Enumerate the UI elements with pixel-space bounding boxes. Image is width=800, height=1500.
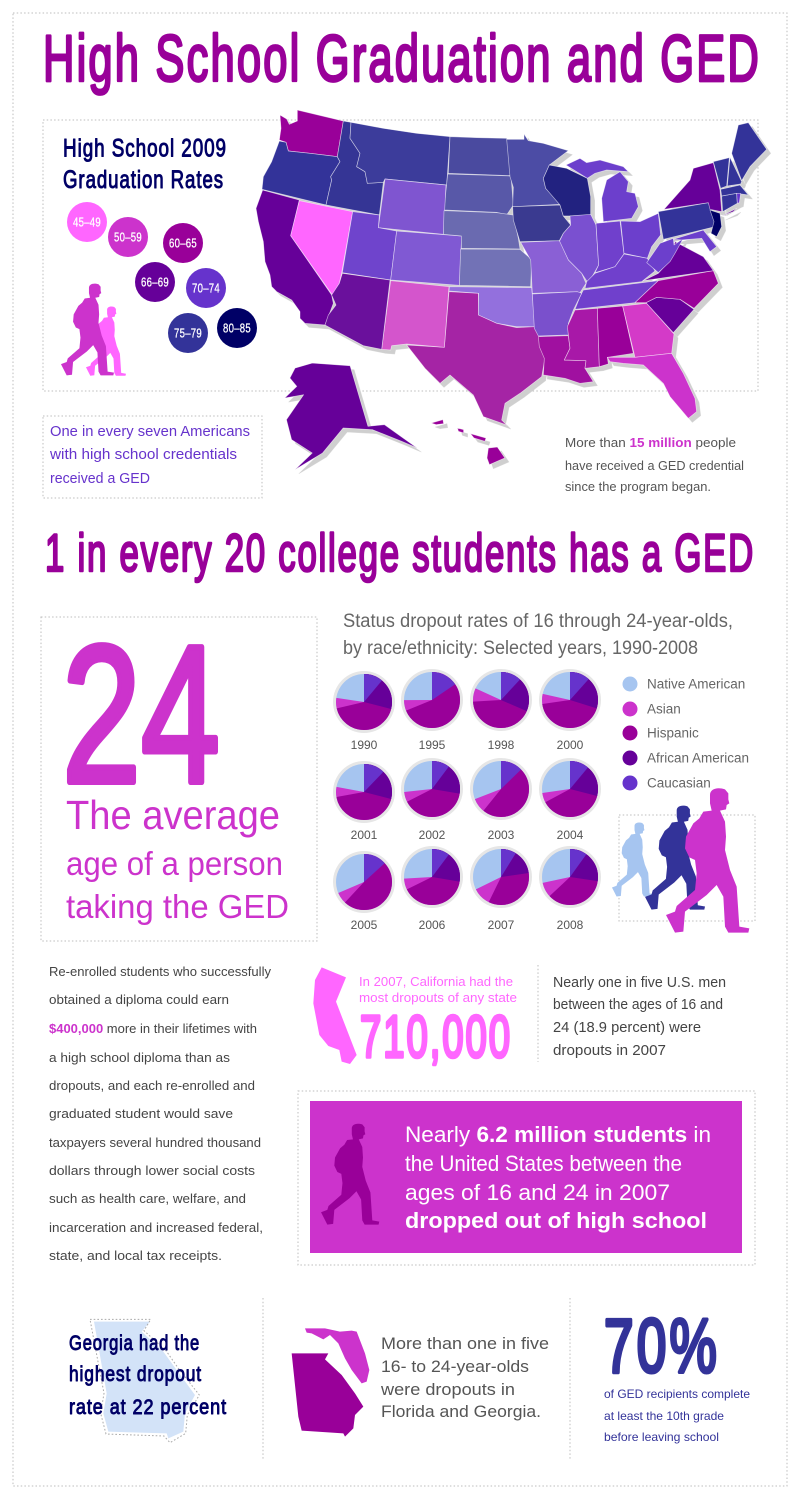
stat: California 710,000: most dropouts of any state [359, 990, 517, 1005]
stat: 70 percent [604, 1304, 750, 1444]
text block: one in five men: between the ages of 16 and [553, 996, 723, 1013]
text: Florida and Georgia: More than one in five [381, 1334, 549, 1353]
heading: status dropout rates [343, 611, 733, 659]
pie 2006: 2006 [419, 918, 446, 932]
pie 2002: 2002 [419, 828, 446, 842]
panel: 6.2 million [298, 1091, 755, 1265]
callout: one in seven: One in every seven Americans [50, 423, 250, 440]
pie 2000: 2000 [557, 738, 584, 752]
legend: graduation rate bubbles: 60–65 [169, 236, 197, 250]
panel: average age 24: 24 [62, 605, 220, 824]
text block: one in five men: 24 (18.9 percent) were [553, 1019, 701, 1036]
pie 2005 [333, 851, 395, 932]
text block: re-enrolled students: dollars through lower social costs [49, 1163, 256, 1178]
pie 2001: 2001 [351, 828, 378, 842]
legend: graduation rate bubbles: 45–49 [73, 214, 101, 230]
text block: re-enrolled students: $400,000 more in their lifetimes with [49, 1021, 257, 1036]
text block: re-enrolled students: obtained a diploma could earn [49, 992, 229, 1007]
pie 2006 [401, 846, 463, 932]
legend: race/ethnicity: African American [647, 750, 749, 766]
legend: race/ethnicity: Hispanic [647, 726, 699, 740]
panel: average age 24: The average [66, 792, 280, 838]
text block: re-enrolled students: such as health care, welfare, and [49, 1191, 246, 1206]
stat: 70 percent: of GED recipients complete [604, 1387, 750, 1401]
icon: three walking students [612, 788, 755, 933]
pie 1990 [333, 671, 395, 752]
text block: re-enrolled students: a high school diploma than as [49, 1050, 231, 1065]
pie 1998 [470, 669, 532, 752]
panel: average age 24: age of a person [66, 845, 283, 882]
callout text: the United States between the [405, 1151, 682, 1176]
pie 1995 [401, 669, 463, 752]
callout text [405, 1122, 711, 1233]
panel: Georgia: highest dropout [69, 1363, 202, 1386]
heading: status dropout rates: Status dropout rates of 16 through 24-year-olds, [343, 611, 733, 632]
text block: re-enrolled students: graduated student would save [49, 1106, 233, 1121]
pie 2008 [539, 846, 601, 932]
callout text: Nearly 6.2 million students in [405, 1122, 711, 1147]
callout: one in seven [43, 416, 262, 498]
pie 1990: 1990 [351, 738, 378, 752]
icon: Georgia and Florida [292, 1328, 369, 1437]
callout text: ages of 16 and 24 in 2007 [405, 1180, 670, 1205]
pie 2003: 2003 [488, 828, 515, 842]
pie 1998: 1998 [488, 738, 515, 752]
stat: California 710,000 [359, 974, 517, 1070]
text block: one in five men [538, 965, 726, 1062]
legend: graduation rate bubbles: 66–69 [141, 274, 169, 290]
text block: one in five men: dropouts in 2007 [553, 1042, 666, 1059]
callout: one in seven: with high school credentials [49, 446, 237, 463]
text: 15 million: since the program began. [565, 479, 711, 494]
legend: race/ethnicity: Native American [647, 676, 745, 692]
text: 15 million [565, 435, 744, 494]
pie 2007: 2007 [488, 918, 515, 932]
legend: graduation rate bubbles: 75–79 [174, 326, 202, 340]
text block: re-enrolled students: Re-enrolled students who successfully [49, 964, 272, 979]
legend: race/ethnicity: Caucasian [647, 776, 711, 790]
pie 2000 [539, 669, 601, 752]
text block: re-enrolled students: state, and local tax receipts. [49, 1248, 222, 1263]
panel: Georgia [69, 1319, 227, 1443]
pie 1995: 1995 [419, 738, 446, 752]
pie 2004: 2004 [557, 828, 584, 842]
heading: status dropout rates: by race/ethnicity: Selected years, 1990-2008 [343, 638, 698, 659]
panel: average age 24 [41, 605, 317, 941]
text block: re-enrolled students [49, 964, 272, 1263]
pie 2001 [333, 761, 395, 842]
panel: map frame [43, 120, 758, 391]
legend: race/ethnicity [622, 676, 749, 790]
pie chart grid [333, 669, 601, 932]
stat: 70 percent: 70% [604, 1304, 720, 1389]
legend: graduation rate bubbles [67, 202, 257, 353]
pie 2007 [470, 846, 532, 932]
stat: 70 percent: before leaving school [604, 1430, 719, 1444]
heading: graduation rates: Graduation Rates [63, 166, 224, 194]
icon: California [313, 967, 357, 1064]
pie 2008: 2008 [557, 918, 584, 932]
legend: graduation rate bubbles: 70–74 [192, 280, 220, 296]
text: 15 million: More than 15 million people [565, 435, 736, 450]
text block: one in five men: Nearly one in five U.S. men [553, 974, 726, 991]
legend: graduation rate bubbles: 50–59 [114, 230, 142, 244]
stat: California 710,000: In 2007, California had the [359, 974, 513, 989]
legend: graduation rate bubbles: 80–85 [223, 320, 251, 336]
text block: re-enrolled students: incarceration and increased federal, [49, 1220, 263, 1235]
US map [256, 110, 767, 470]
heading: graduation rates [63, 134, 227, 194]
pie 2005: 2005 [351, 918, 378, 932]
stat: 70 percent: at least the 10th grade [604, 1409, 724, 1423]
callout: one in seven: received a GED [50, 470, 150, 487]
text: Florida and Georgia: 16- to 24-year-olds [381, 1357, 529, 1376]
legend: race/ethnicity: Asian [647, 702, 681, 716]
heading: graduation rates: High School 2009 [63, 134, 227, 162]
callout text: dropped out of high school [405, 1208, 707, 1233]
panel: Georgia: rate at 22 percent [69, 1396, 227, 1419]
icon: two walking students [61, 284, 126, 376]
text: 15 million: have received a GED credential [565, 458, 744, 473]
text block: re-enrolled students: dropouts, and each re-enrolled and [49, 1078, 255, 1093]
pie 2004 [539, 758, 601, 842]
panel: average age 24: taking the GED [66, 888, 289, 925]
text: Florida and Georgia [380, 1334, 549, 1421]
panel: Georgia: Georgia had the [69, 1332, 200, 1355]
text: Florida and Georgia: Florida and Georgia. [381, 1402, 541, 1421]
text block: re-enrolled students: taxpayers several hundred thousand [49, 1135, 261, 1150]
text: Florida and Georgia: were dropouts in [380, 1380, 515, 1399]
pie 2002 [401, 758, 463, 842]
icon: walking student [321, 1124, 379, 1225]
stat: California 710,000: 710,000 [360, 1004, 512, 1070]
pie 2003 [470, 758, 532, 842]
